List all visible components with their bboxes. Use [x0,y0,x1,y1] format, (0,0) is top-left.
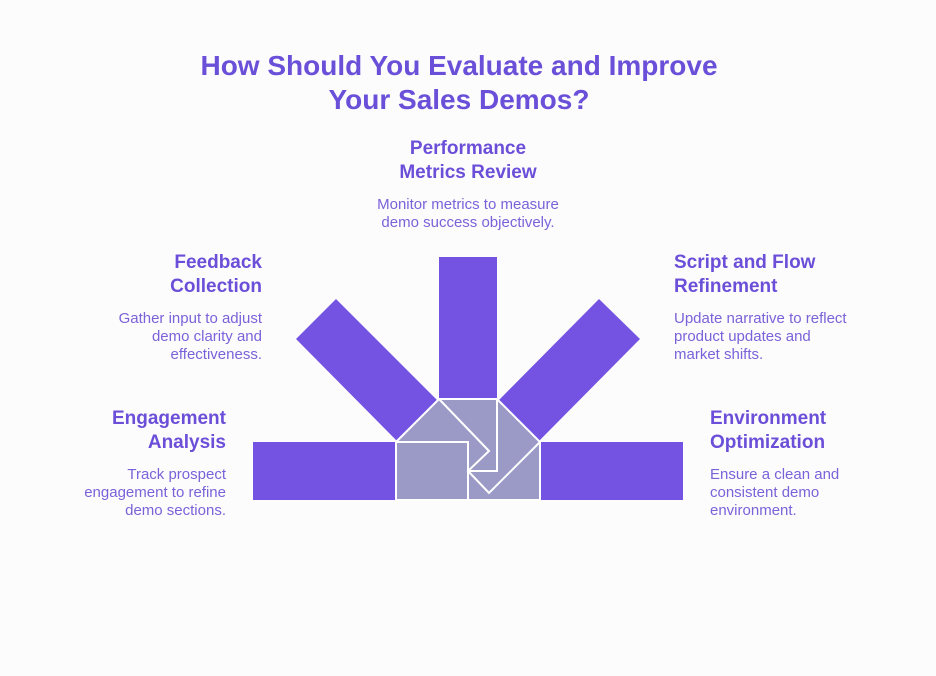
text: environment optimization: environment. [710,502,797,519]
text: script and flow refinement: Script and Flow [674,252,815,273]
text: script and flow refinement: Refinement [674,276,777,297]
text: feedback collection: Collection [170,276,262,297]
text: feedback collection: effectiveness. [171,346,262,363]
text: performance metrics review: Monitor metrics to measure [377,196,559,213]
text: environment optimization: Optimization [710,432,825,453]
text: performance metrics review: Performance [410,138,526,159]
text: performance metrics review [377,138,559,231]
text: engagement analysis: Engagement [112,408,226,429]
title: How Should You Evaluate and Improve [200,50,718,81]
text: performance metrics review: demo success objectively. [381,214,555,231]
text: engagement analysis: engagement to refine [84,484,226,501]
text: environment optimization [710,408,839,519]
text: engagement analysis [84,408,226,519]
text: engagement analysis: demo sections. [125,502,226,519]
text: feedback collection: Gather input to adjust [119,310,262,327]
text: environment optimization: Ensure a clean and [710,466,839,483]
bar: performance [439,257,497,399]
bar: script [499,299,640,441]
title: Your Sales Demos? [329,84,589,115]
text: performance metrics review: Metrics Review [399,162,537,183]
title [200,50,718,115]
bar: engagement [253,442,396,500]
text: script and flow refinement: market shifts. [674,346,763,363]
text: engagement analysis: Track prospect [127,466,226,483]
text: feedback collection: Feedback [174,252,262,273]
text: script and flow refinement [674,252,847,363]
text: script and flow refinement: Update narrative to reflect [674,310,847,327]
center hub [396,399,540,500]
bar: feedback [296,299,437,441]
text: engagement analysis: Analysis [148,432,226,453]
text: environment optimization: consistent demo [710,484,819,501]
bar: environment [540,442,683,500]
text: environment optimization: Environment [710,408,826,429]
text: feedback collection [119,252,262,363]
text: script and flow refinement: product updates and [674,328,811,345]
text: feedback collection: demo clarity and [152,328,262,345]
